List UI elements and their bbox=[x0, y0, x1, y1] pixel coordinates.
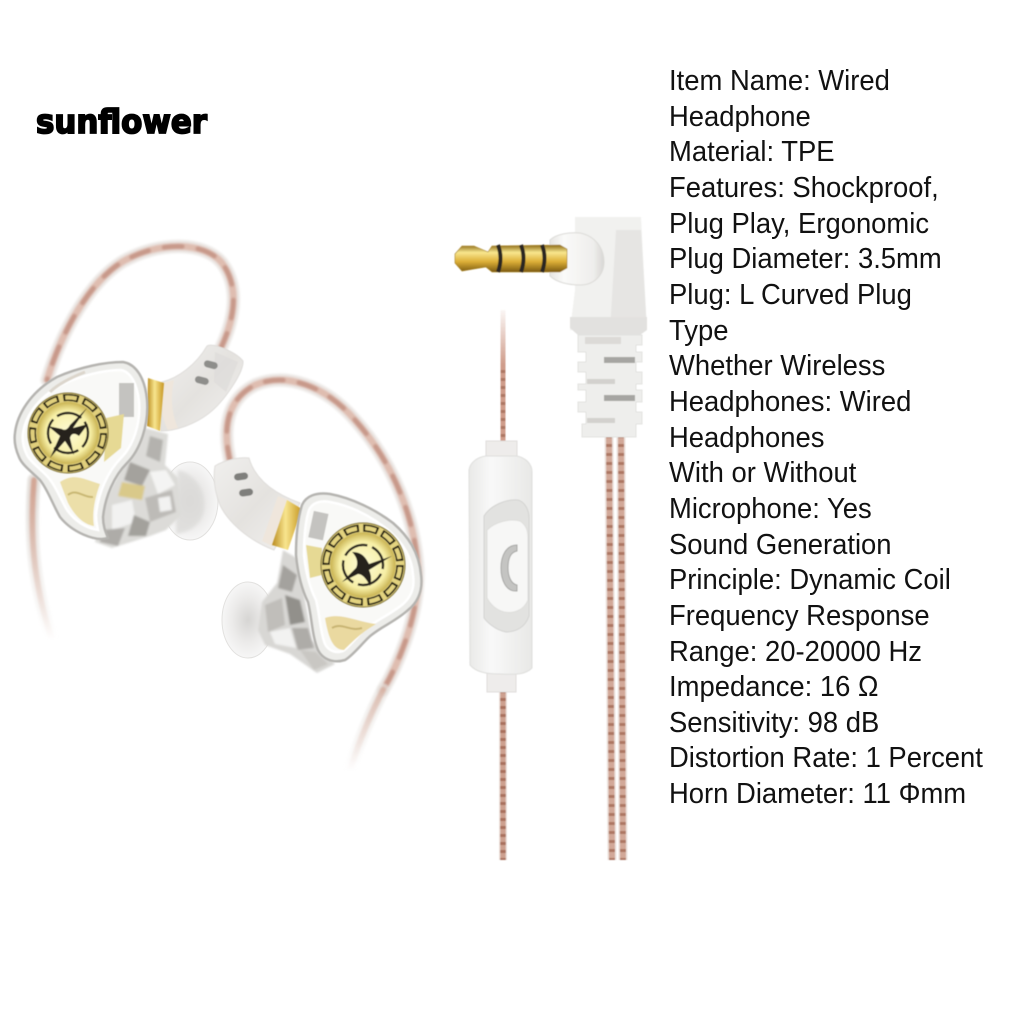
plug collar bbox=[550, 233, 604, 285]
specification text block: Whether Wireless bbox=[669, 350, 885, 382]
right ear tip bbox=[222, 582, 274, 658]
right yellow interior bbox=[325, 616, 376, 650]
specification text block bbox=[669, 65, 983, 810]
strain relief bbox=[578, 335, 642, 437]
specification text block: With or Without bbox=[669, 457, 856, 489]
left crystal nozzle bbox=[95, 428, 181, 548]
brand logo: sunflower bbox=[36, 102, 208, 141]
inline microphone remote bbox=[469, 441, 532, 692]
specification text block: Sensitivity: 98 dB bbox=[669, 707, 879, 739]
right crystal nozzle bbox=[258, 550, 335, 673]
plug housing bbox=[570, 217, 647, 330]
twin cable below plug bbox=[609, 435, 623, 860]
specification text block: Headphones: Wired bbox=[669, 386, 911, 418]
left star mark bbox=[41, 406, 95, 460]
right white stem bbox=[214, 458, 300, 550]
left gold band bbox=[147, 378, 164, 431]
left gold disc with key pattern bbox=[28, 393, 108, 473]
left earbud cable bbox=[32, 246, 233, 640]
icon: handset bbox=[501, 545, 517, 591]
single cable below mic bbox=[499, 690, 507, 860]
left yellow interior bbox=[60, 477, 100, 526]
specification text block: Impedance: 16 Ω bbox=[669, 671, 879, 703]
specification text block: Distortion Rate: 1 Percent bbox=[669, 742, 983, 774]
specification text block: Range: 20-20000 Hz bbox=[669, 636, 922, 668]
specification text block: Principle: Dynamic Coil bbox=[669, 564, 951, 596]
left ear tip bbox=[162, 462, 218, 540]
single cable above mic bbox=[500, 310, 506, 442]
remote button recess bbox=[484, 500, 529, 632]
right gold band bbox=[272, 500, 302, 550]
specification text block: Headphone bbox=[669, 101, 811, 133]
specification text block: Material: TPE bbox=[669, 136, 835, 168]
remote necks bbox=[486, 441, 517, 692]
left earbud bbox=[15, 345, 243, 548]
specification text block: Sound Generation bbox=[669, 529, 892, 561]
specification text block: Plug Play, Ergonomic bbox=[669, 208, 929, 240]
remote button bbox=[487, 520, 528, 612]
gold plug pin bbox=[455, 245, 567, 272]
specification text block: Frequency Response bbox=[669, 600, 930, 632]
specification text block: Type bbox=[669, 315, 728, 347]
specification text block: Horn Diameter: 11 Φmm bbox=[669, 778, 966, 810]
specification text block: Item Name: Wired bbox=[669, 65, 890, 97]
right earbud bbox=[214, 458, 421, 673]
left shell bbox=[15, 362, 147, 539]
left white stem bbox=[161, 345, 243, 431]
specification text block: Features: Shockproof, bbox=[669, 172, 939, 204]
remote body bbox=[469, 456, 532, 674]
specification text block: Plug Diameter: 3.5mm bbox=[669, 243, 942, 275]
specification text block: Plug: L Curved Plug bbox=[669, 279, 912, 311]
specification text block: Microphone: Yes bbox=[669, 493, 872, 525]
specification text block: Headphones bbox=[669, 422, 824, 454]
angled 3.5mm plug bbox=[455, 217, 647, 437]
right gold disc with key pattern bbox=[321, 523, 405, 607]
right star mark bbox=[336, 538, 392, 592]
right earbud cable bbox=[227, 380, 418, 770]
right shell bbox=[296, 493, 421, 661]
